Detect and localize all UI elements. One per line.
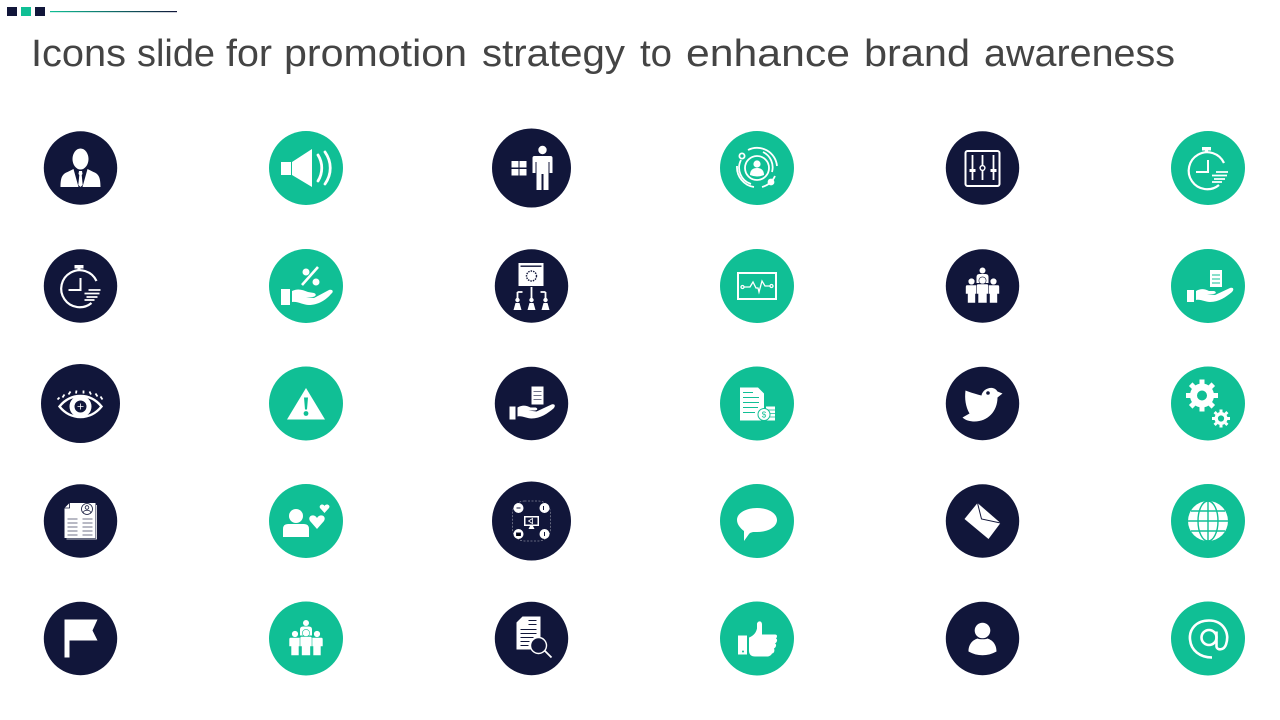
icon: team group navy — [946, 249, 1019, 323]
title: strategy — [482, 33, 625, 75]
icon: envelope — [946, 484, 1019, 558]
icon: gears — [1171, 366, 1245, 440]
icon: eye — [41, 364, 120, 443]
title: enhance — [686, 33, 850, 75]
title: to — [640, 33, 672, 75]
title: awareness — [984, 33, 1175, 75]
title — [31, 33, 1175, 75]
icon: stopwatch navy — [44, 249, 117, 323]
title: promotion — [284, 33, 467, 75]
icon: resume document — [44, 484, 117, 558]
icon: speaker — [269, 131, 343, 205]
icon: invoice with coins: $ — [762, 410, 767, 420]
icon: businessman — [44, 131, 117, 205]
icon: person with hearts — [269, 484, 343, 558]
title: slide — [137, 33, 215, 75]
title: Icons — [31, 33, 126, 75]
icon: at sign — [1171, 602, 1245, 676]
icon: person and grid — [492, 128, 571, 208]
icon: document search — [495, 602, 568, 675]
icon: thumbs up — [720, 602, 794, 676]
icon: user — [946, 602, 1019, 675]
title: brand — [864, 33, 970, 75]
icon: hand with document teal — [1171, 249, 1245, 323]
icon: sliders — [946, 131, 1019, 205]
icon: warning triangle — [269, 366, 343, 440]
icon: hand with document navy — [495, 367, 568, 440]
icon: bird — [946, 367, 1019, 440]
icon: website network — [495, 249, 568, 323]
icon: invoice with coins — [720, 366, 794, 440]
title: for — [226, 33, 272, 75]
icon: monitor pulse — [720, 249, 794, 323]
icon: flag — [44, 602, 117, 675]
icon: team group teal — [269, 602, 343, 676]
icon: stopwatch teal — [1171, 131, 1245, 205]
header accent squares and line — [7, 7, 177, 16]
icon: speech bubble — [720, 484, 794, 558]
icon: media hub — [492, 482, 571, 560]
icon: hand with percent — [269, 249, 343, 323]
icon: globe — [1171, 484, 1245, 558]
icon: person in cycle — [720, 131, 794, 205]
